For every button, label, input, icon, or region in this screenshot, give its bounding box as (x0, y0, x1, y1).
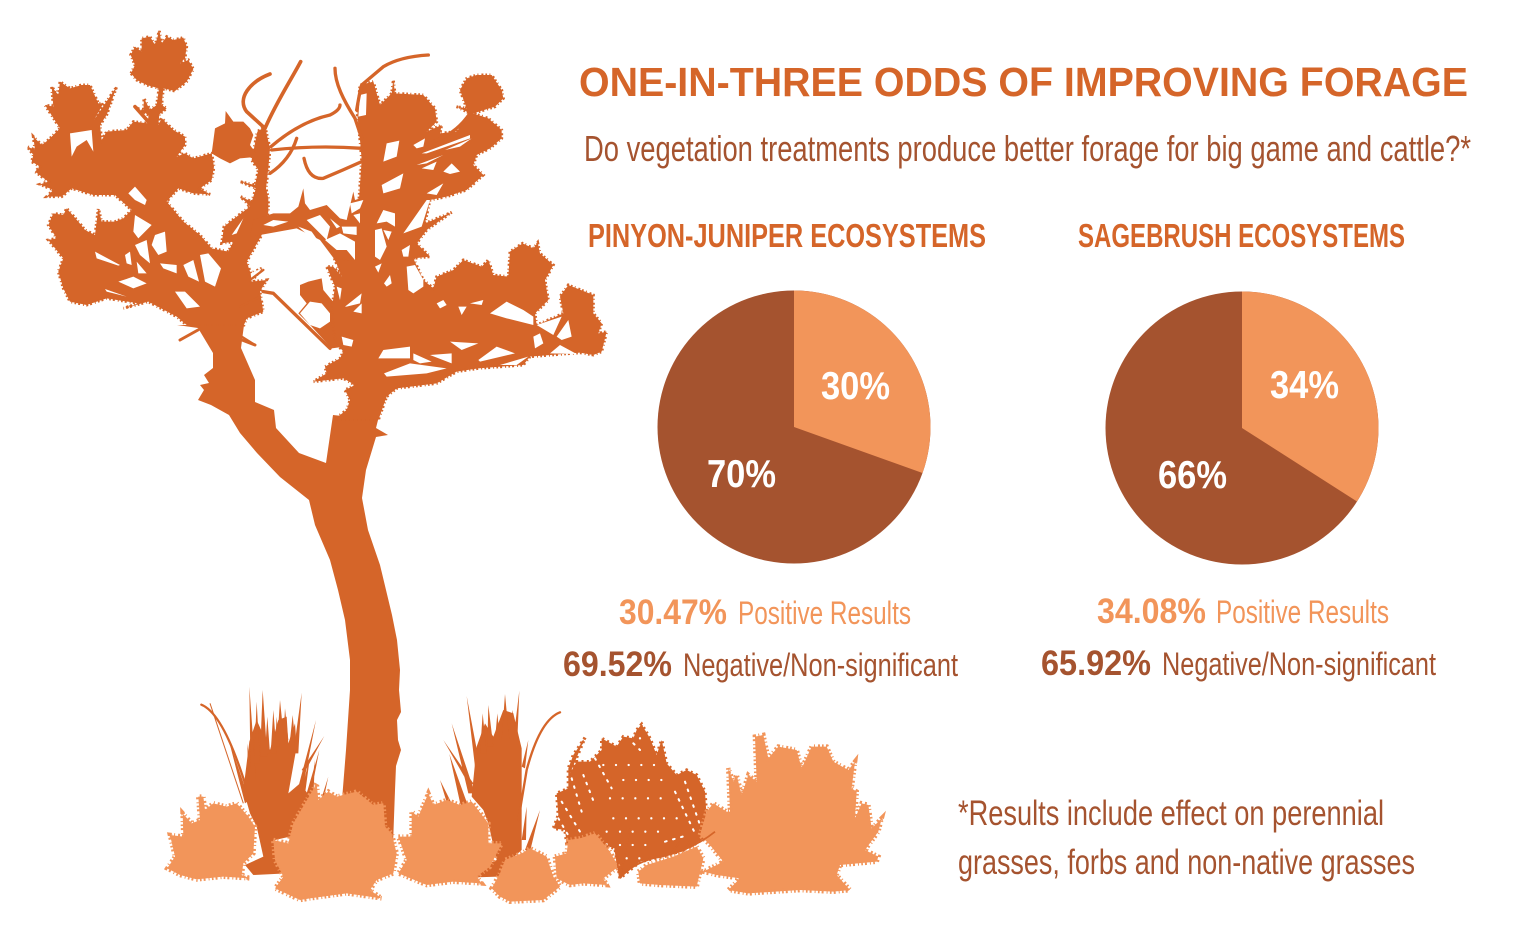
right foliage silhouette (313, 75, 607, 420)
pie chart: sagebrush: 66% (1158, 454, 1227, 497)
negative results: pinyon-juniper: Negative/Non-significant (683, 647, 958, 683)
sagebrush shrubs left (167, 783, 560, 902)
small foliage tuft (212, 111, 258, 163)
left fine branches (135, 62, 301, 128)
pie chart: pinyon-juniper (658, 290, 930, 564)
illustration: tumbleweed and shrubs right (553, 724, 882, 893)
lower twigs (180, 330, 255, 345)
panel: sagebrush ecosystems (1041, 217, 1436, 683)
positive results: pinyon-juniper: Positive Results (738, 595, 911, 631)
pie chart: sagebrush: 34% (1270, 364, 1339, 407)
tumbleweed stem twigs (615, 828, 715, 878)
positive results: sagebrush (1097, 592, 1389, 631)
grass clump right (440, 691, 560, 877)
tumbleweed gaps (603, 738, 680, 858)
footnote (958, 794, 1415, 882)
negative results: pinyon-juniper (563, 645, 958, 684)
right fine branches (263, 55, 470, 348)
pie chart: pinyon-juniper: 70% (707, 453, 776, 496)
illustration: pinyon-juniper tree (27, 31, 607, 872)
right foliage gaps (263, 93, 577, 377)
left foliage gaps (70, 130, 288, 308)
negative results: pinyon-juniper: 69.52% (563, 645, 672, 684)
positive results: pinyon-juniper: 30.47% (619, 593, 727, 632)
grass clump left (201, 687, 328, 875)
positive results: pinyon-juniper (619, 593, 911, 632)
tumbleweed body (553, 724, 715, 878)
footnote: *Results include effect on perennial (958, 794, 1384, 833)
title: ONE-IN-THREE ODDS OF IMPROVING FORAGE (579, 59, 1468, 105)
illustration: grasses and shrubs left (167, 687, 560, 902)
tree trunk and left limb (177, 325, 401, 872)
left foliage silhouette (27, 31, 270, 325)
central arm (250, 183, 373, 263)
tumbleweed outer lace (558, 743, 700, 842)
branch below limb (240, 270, 263, 345)
pie chart: pinyon-juniper: 30% (821, 365, 890, 408)
negative results: sagebrush: Negative/Non-significant (1162, 646, 1436, 682)
positive results: sagebrush: Positive Results (1216, 594, 1389, 630)
panel: pinyon-juniper ecosystems (563, 217, 986, 684)
heading: pinyon-juniper: PINYON-JUNIPER ECOSYSTEMS (588, 217, 986, 254)
negative results: sagebrush: 65.92% (1041, 644, 1151, 683)
sagebrush shrubs right (555, 735, 882, 893)
tree crown right (240, 55, 607, 420)
tree crown left (27, 31, 301, 325)
positive results: sagebrush: 34.08% (1097, 592, 1206, 631)
heading: sagebrush: SAGEBRUSH ECOSYSTEMS (1078, 217, 1405, 254)
negative results: sagebrush (1041, 644, 1436, 683)
small flower cluster (298, 278, 345, 348)
pie chart: sagebrush (1106, 292, 1378, 564)
tumbleweed (553, 724, 715, 878)
